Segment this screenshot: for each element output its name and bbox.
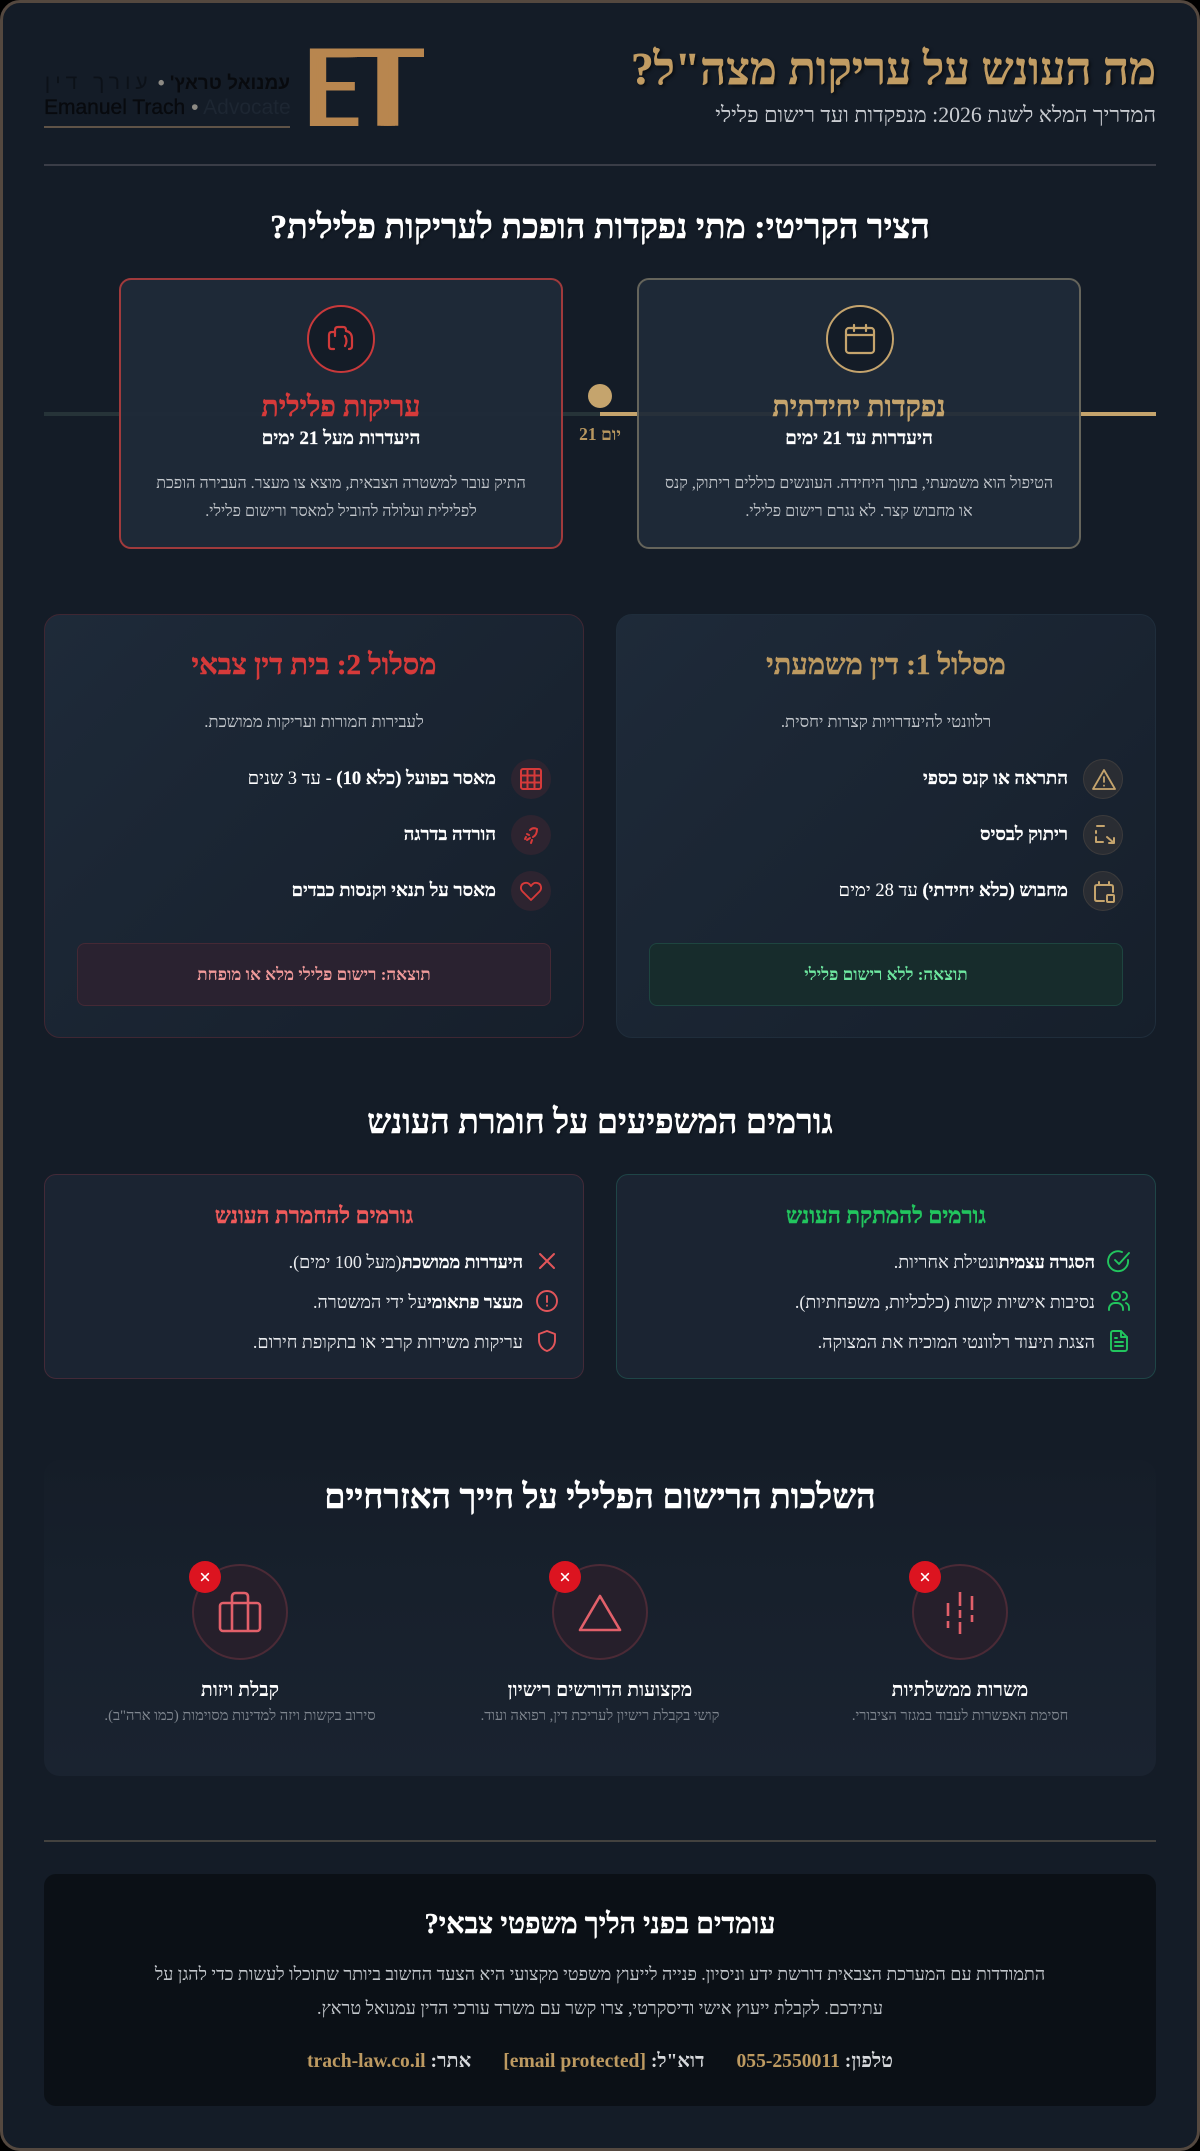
icon: shield bbox=[538, 1330, 556, 1352]
timeline marker: day 21 dot bbox=[588, 384, 612, 408]
track description: רלוונטי להיעדרויות קצרות יחסית. bbox=[781, 712, 991, 731]
icon: suitcase bbox=[192, 1564, 288, 1660]
track title: מסלול 1: דין משמעתי bbox=[766, 649, 1006, 681]
icon: alert circle bbox=[536, 1290, 558, 1312]
icon: camera-like bbox=[307, 305, 375, 373]
logo: underline bbox=[44, 126, 290, 128]
icon: x bbox=[539, 1253, 555, 1269]
axis: dark segment bbox=[44, 412, 600, 416]
consequence description: קושי בקבלת רישיון לעריכת דין, רפואה ועוד. bbox=[481, 1708, 719, 1724]
header: subtitle: המדריך המלא לשנת 2026: מנפקדות ועד רישום פלילי bbox=[715, 103, 1156, 127]
heading: consequences: השלכות הרישום הפלילי על חייך האזרחיים bbox=[324, 1479, 876, 1516]
icon: detention bbox=[1083, 871, 1123, 911]
icon: warning bbox=[1083, 759, 1123, 799]
axis: gold segment bbox=[600, 412, 1156, 416]
logo: English name: Emanuel Trach • Advocate bbox=[44, 96, 291, 119]
factors title: גורמים להחמרת העונש bbox=[215, 1203, 413, 1228]
icon: users bbox=[1108, 1291, 1130, 1311]
result: criminal record: תוצאה: רישום פלילי מלא או מופחת bbox=[197, 965, 431, 984]
icon: triangle bbox=[552, 1564, 648, 1660]
factor: documentation: הצגת תיעוד רלוונטי המוכיח את המצוקה. bbox=[818, 1332, 1095, 1352]
panel: track 2 military court bbox=[44, 614, 584, 1038]
result: no record: תוצאה: ללא רישום פלילי bbox=[804, 965, 968, 984]
timeline label: day 21: יום 21 bbox=[579, 424, 621, 444]
item: demotion bbox=[404, 815, 551, 855]
card subtitle: היעדרות מעל 21 ימים bbox=[262, 428, 420, 449]
consequence title: קבלת ויזות bbox=[201, 1680, 279, 1701]
contact description: התמודדות עם המערכת הצבאית דורשת ידע וניסיון. פנייה לייעוץ משפטי מקצועי היא הצעד החשוב ביותר שתוכלו לעשות כדי להגן על bbox=[155, 1964, 1045, 1984]
contact description bbox=[154, 1964, 1045, 2018]
consequence description: סירוב בקשות ויזה למדינות מסוימות (כמו ארה"ב). bbox=[104, 1708, 376, 1724]
card description: התיק עובר למשטרה הצבאית, מוצא צו מעצר. העבירה הופכת bbox=[156, 475, 526, 492]
badge: x bbox=[909, 1561, 941, 1593]
factor: long absence: היעדרות ממושכת(מעל 100 ימים). bbox=[289, 1252, 523, 1272]
logo: ET mark bbox=[308, 48, 424, 128]
panel: track 1 disciplinary bbox=[616, 614, 1156, 1038]
badge: x bbox=[549, 1561, 581, 1593]
consequence description: חסימת האפשרות לעבוד במגזר הציבורי. bbox=[852, 1708, 1068, 1724]
item: base confinement bbox=[980, 815, 1123, 855]
factor: hardship: נסיבות אישיות קשות (כלכליות, משפחתיות). bbox=[795, 1292, 1095, 1312]
consequence: government jobs bbox=[852, 1561, 1068, 1724]
consequence title: מקצועות הדורשים רישיון bbox=[508, 1680, 692, 1701]
card description bbox=[665, 474, 1053, 520]
icon: confinement bbox=[1083, 815, 1123, 855]
panel: desertion card bbox=[119, 278, 563, 549]
consequence: licensed professions bbox=[481, 1561, 719, 1724]
icon: heart bbox=[511, 871, 551, 911]
icon: prison grid bbox=[511, 759, 551, 799]
icon: bars bbox=[912, 1564, 1008, 1660]
item: detention: מחבוש (כלא יחידתי) עד 28 ימים bbox=[839, 881, 1068, 901]
panel: absence card bbox=[637, 278, 1081, 549]
panel: aggravating factors bbox=[44, 1174, 584, 1379]
icon: document bbox=[1110, 1330, 1128, 1352]
badge: x bbox=[189, 1561, 221, 1593]
icon: check circle bbox=[1107, 1250, 1130, 1272]
item: suspended sentence: מאסר על תנאי וקנסות כבדים bbox=[291, 881, 496, 901]
card subtitle: היעדרות עד 21 ימים bbox=[785, 428, 933, 449]
panel: contact call to action bbox=[44, 1874, 1156, 2106]
item: detention bbox=[839, 871, 1123, 911]
item: warning or fine bbox=[923, 759, 1123, 799]
contact details: טלפון: 055-2550011דוא"ל: [email protected]אתר: trach-law.co.il bbox=[307, 2051, 893, 2072]
contact heading: עומדים בפני הליך משפטי צבאי? bbox=[425, 1909, 775, 1940]
panel: mitigating factors bbox=[616, 1174, 1156, 1379]
card description bbox=[156, 474, 526, 520]
item: base confinement: ריתוק לבסיס bbox=[980, 825, 1068, 845]
header: logo bbox=[44, 48, 424, 128]
heading: factors: גורמים המשפיעים על חומרת העונש bbox=[367, 1104, 833, 1141]
icon: demotion bbox=[511, 815, 551, 855]
result: criminal record bbox=[77, 943, 551, 1006]
item: warning or fine: התראה או קנס כספי bbox=[923, 769, 1068, 789]
card description: או מחבוש קצר. לא נגרם רישום פלילי. bbox=[745, 503, 973, 520]
timeline axis bbox=[44, 412, 1156, 416]
contact description: עתידכם. לקבלת ייעוץ אישי ודיסקרטי, צרו קשר עם משרד עורכי הדין עמנואל טראץ. bbox=[317, 1998, 883, 2018]
card title: נפקדות יחידתית bbox=[772, 392, 946, 423]
header: title: מה העונש על עריקות מצה"ל? bbox=[631, 44, 1156, 94]
card title: עריקות פלילית bbox=[261, 392, 421, 423]
consequence title: משרות ממשלתיות bbox=[892, 1680, 1028, 1701]
card description: הטיפול הוא משמעתי, בתוך היחידה. העונשים כוללים ריתוק, קנס bbox=[665, 475, 1053, 492]
factor: sudden arrest: מעצר פתאומיעל ידי המשטרה. bbox=[313, 1292, 523, 1312]
panel: consequences bbox=[44, 1460, 1156, 1776]
icon: calendar bbox=[826, 305, 894, 373]
track title: מסלול 2: בית דין צבאי bbox=[191, 649, 436, 681]
consequence: visas bbox=[104, 1561, 376, 1724]
item: actual prison: מאסר בפועל (כלא 10) - עד 3 שנים bbox=[248, 769, 496, 789]
item: suspended sentence bbox=[291, 871, 551, 911]
track description: לעבירות חמורות ועריקות ממושכת. bbox=[204, 712, 424, 731]
card description: לפלילית ועלולה להוביל למאסר ורישום פלילי. bbox=[205, 503, 477, 520]
factor: combat service: עריקות משירות קרבי או בתקופת חירום. bbox=[253, 1332, 523, 1352]
item: actual prison bbox=[248, 759, 551, 799]
factor: self surrender: הסגרה עצמיתונטילת אחריות. bbox=[894, 1252, 1095, 1272]
logo: Hebrew name: עמנואל טראץ' • עורך דין bbox=[45, 71, 290, 94]
factors title: גורמים להמתקת העונש bbox=[786, 1203, 986, 1228]
heading: critical axis: הציר הקריטי: מתי נפקדות הופכת לעריקות פלילית? bbox=[270, 209, 930, 246]
result: no record bbox=[649, 943, 1123, 1006]
item: demotion: הורדה בדרגה bbox=[404, 825, 496, 845]
